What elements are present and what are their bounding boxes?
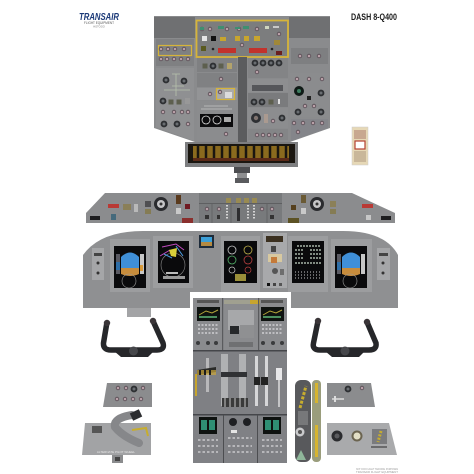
centre pedestal — [193, 298, 287, 463]
centre control strip — [263, 233, 287, 288]
overhead: centre seam — [238, 57, 247, 142]
title: Dash 8-Q400: DASH 8-Q400 — [351, 12, 397, 23]
overhead: left column — [156, 39, 194, 141]
pedestal: top section — [193, 298, 287, 351]
overhead: centre left column — [197, 58, 237, 141]
right control yoke — [313, 318, 376, 357]
glareshield: centre section — [199, 193, 282, 223]
overhead panel — [154, 16, 330, 142]
overhead: dark top corners — [154, 17, 330, 38]
overhead: yellow outlined top section — [196, 20, 288, 57]
main instrument panel — [83, 231, 398, 317]
right side console panel — [327, 383, 375, 407]
logo: Transair: HOTOGO — [93, 24, 105, 28]
logo: Transair — [79, 12, 120, 28]
overhead: right column — [290, 48, 329, 141]
glareshield: right controls — [288, 195, 391, 223]
engine display — [221, 236, 260, 292]
left PFD — [110, 239, 150, 292]
nose wheel tiller panel — [82, 409, 151, 463]
overhead: centre right column — [248, 58, 288, 140]
copyright small print: NOT FOR FLIGHT TRAINING PURPOSES — [356, 467, 398, 471]
right gauges panel — [327, 423, 397, 455]
nose wheel tiller panel: ALTERNATE PILOT WHEEL — [97, 450, 135, 454]
glareshield: left controls — [90, 195, 193, 223]
right PFD — [331, 239, 372, 292]
glareshield panel — [86, 193, 395, 223]
left side switches — [92, 248, 104, 280]
pedestal: throttle section — [193, 350, 287, 415]
logo: Transair: FLIGHT EQUIPMENT — [84, 21, 115, 25]
pedestal: lower section — [193, 414, 287, 463]
right side switches — [377, 248, 390, 280]
left control yoke — [103, 318, 163, 357]
copyright small print: TRANSAIR FLIGHT EQUIPMENT — [356, 470, 398, 474]
left MFD navigation — [153, 236, 193, 288]
logo: Transair: TRANSAIR — [79, 12, 120, 23]
checklist card — [352, 127, 368, 165]
right MFD systems — [288, 236, 328, 292]
copyright small print — [356, 467, 398, 474]
standby instrument — [199, 235, 214, 248]
lower knee panel — [127, 308, 151, 317]
annunciator panel — [185, 142, 298, 167]
rudder trim strips — [295, 380, 321, 462]
left side console panel — [103, 383, 152, 407]
compass connector — [234, 167, 250, 183]
